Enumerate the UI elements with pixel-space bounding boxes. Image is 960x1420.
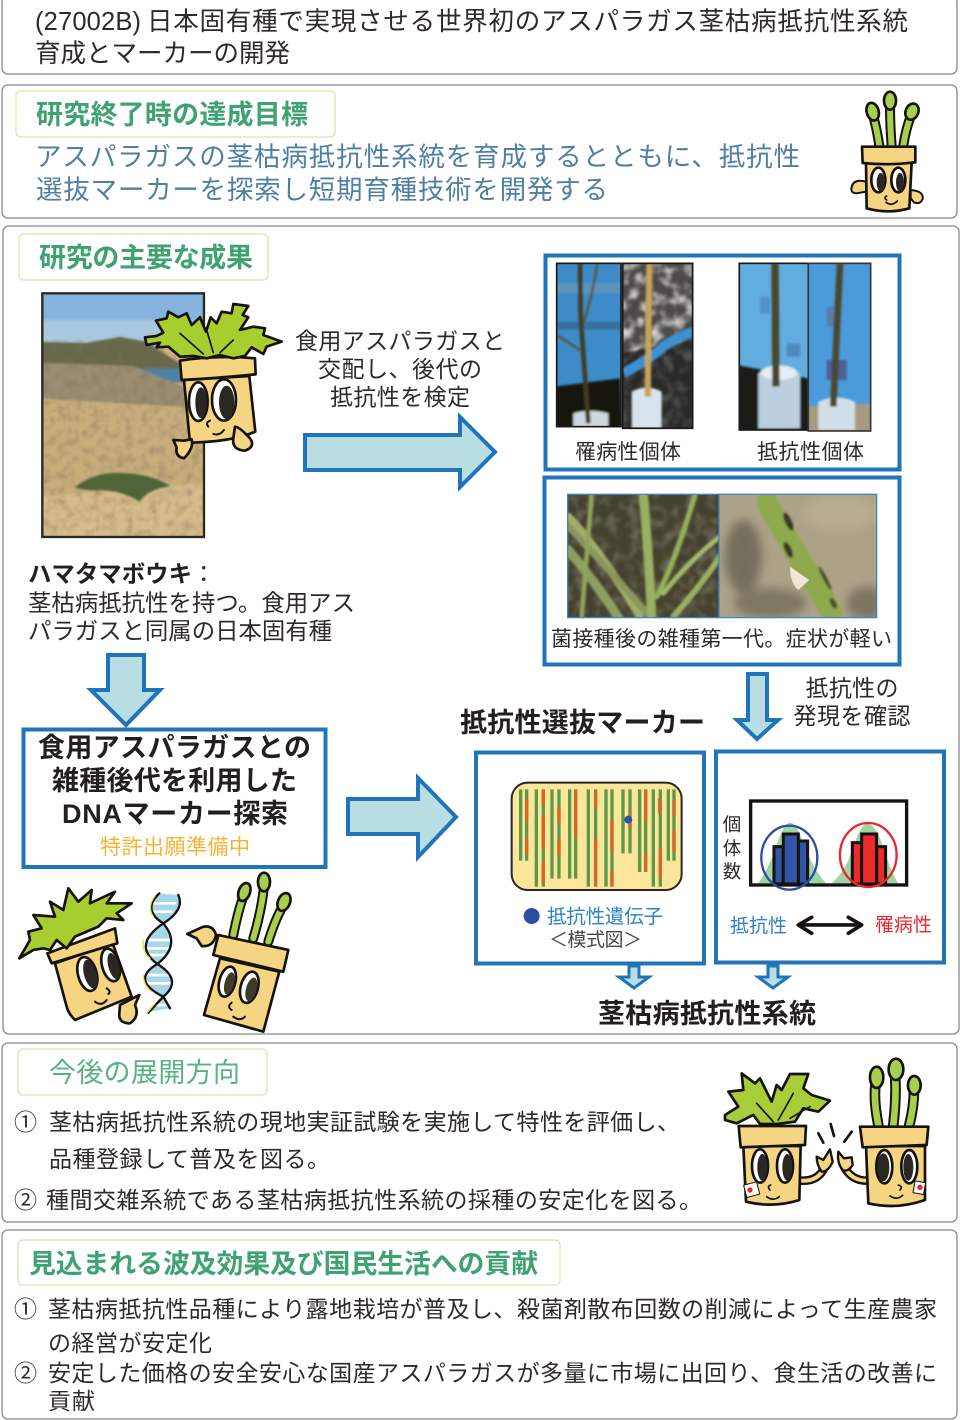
text: confirm resistance [794,675,910,729]
heading: stem blight resistant line: 茎枯病抵抗性系統 [598,999,816,1029]
list: future items: 茎枯病抵抗性系統の現地実証試験を実施して特性を評価し、 [49,1109,680,1135]
axis label: number of individuals [723,814,741,882]
legend: resistance gene: 抵抗性遺伝子 [547,906,663,928]
icon: hamatamabouki mascot pointing [19,888,139,1023]
heading: main results [19,234,268,280]
list: impact items: ② [14,1360,37,1386]
arrow: right to marker panels [348,778,456,857]
heading: main results: 研究の主要な成果 [39,243,253,273]
description: hamatamabouki: パラガスと同属の日本固有種 [28,618,332,644]
title text [35,8,908,68]
panel: F1 hybrid photos [544,478,900,664]
label: susceptible: 罹病性 [875,914,932,936]
title text: 育成とマーカーの開発 [35,40,290,68]
list: future items: ② [14,1187,37,1213]
heading: expected impact: 見込まれる波及効果及び国民生活への貢献 [29,1249,538,1279]
heading: future direction [18,1049,267,1095]
list: impact items [14,1296,937,1414]
list: impact items: 茎枯病抵抗性品種により露地栽培が普及し、殺菌剤散布回数の削減によって生産農家 [48,1296,937,1322]
heading: goal: 研究終了時の達成目標 [36,100,308,130]
panel: expected impact [2,1230,957,1419]
text: crossing with edible asparagus: 食用アスパラガスと [295,328,505,354]
icon: DNA helix [143,893,180,1013]
panel: disease test photos [546,256,900,470]
title text: (27002B) [35,8,141,36]
panel: future direction [2,1043,957,1222]
text: crossing with edible asparagus [295,328,505,410]
chart: distribution histogram [751,801,907,933]
axis label: number of individuals: 個 [723,814,741,835]
heading: expected impact [18,1240,560,1285]
heading: resistance selection marker: 抵抗性選抜マーカー [460,708,705,738]
arrow: right to test photos [305,417,495,487]
panel: goal at end of research [2,85,957,218]
photo: resistant stem [737,263,810,432]
panel: project title [2,0,957,74]
list: future items: 品種登録して普及を図る。 [49,1146,330,1172]
title text: 日本固有種で実現させる世界初のアスパラガス茎枯病抵抗性系統 [147,8,908,36]
photo: hybrid plants [568,494,887,620]
description: hamatamabouki: 茎枯病抵抗性を持つ。食用アス [28,590,355,616]
panel: resistance gene schematic [476,752,704,964]
panel: individuals distribution [716,752,944,962]
axis label: number of individuals: 数 [723,861,741,882]
description: hamatamabouki: ハマタマボウキ [28,561,192,587]
arrow: down to marker box [91,655,160,725]
list: impact items: ① [14,1296,37,1322]
box: DNA marker search: 特許出願準備中 [100,836,250,859]
arrow: down to distribution chart [737,674,778,739]
goal text: アスパラガスの茎枯病抵抗性系統を育成するとともに、抵抗性 [35,142,800,172]
description: hamatamabouki [28,561,355,644]
label: resistant: 抵抗性個体 [757,441,864,464]
goal text [35,142,800,205]
photo: resistant stem close-up [807,263,873,432]
list: impact items: 安定した価格の安全安心な国産アスパラガスが多量に市場に出回り、食生活の改善に [48,1360,937,1386]
arrow: small down right [758,966,788,988]
description: hamatamabouki: ： [192,561,215,587]
label: schematic: ＜模式図＞ [549,929,642,951]
list: future items [14,1109,702,1213]
text: confirm resistance: 発現を確認 [794,703,910,729]
photo: susceptible stem close-up [622,263,693,430]
arrow: small down left [619,966,649,988]
icon: hamatamabouki mascot [145,304,282,458]
list: impact items: 貢献 [48,1388,95,1414]
text: crossing with edible asparagus: 抵抗性を検定 [330,384,470,410]
text: crossing with edible asparagus: 交配し、後代の [318,356,482,382]
list: future items: 種間交雑系統である茎枯病抵抗性系統の採種の安定化を図る。 [46,1187,702,1213]
chart: chromosome schematic [512,783,682,924]
goal text: 選抜マーカーを探索し短期育種技術を開発する [36,175,608,205]
label: resistant: 抵抗性 [730,915,787,937]
list: impact items: の経営が安定化 [48,1330,212,1356]
box: DNA marker search: DNAマーカー探索 [62,799,288,829]
list: future items: ① [14,1109,37,1135]
photo: susceptible individual [555,263,873,432]
panel: main research results [3,226,959,1034]
photo: hamatamabouki on beach [40,290,207,540]
icon: asparagus mascot pointing [187,873,293,1032]
caption: F1 hybrid: 菌接種後の雑種第一代。症状が軽い [551,628,892,651]
label: susceptible: 罹病性個体 [575,441,681,464]
resistance gene dot [624,816,632,824]
double arrow [798,917,862,933]
box: DNA marker search [24,730,326,867]
text: confirm resistance: 抵抗性の [806,675,898,701]
box: DNA marker search: 雑種後代を利用した [52,766,297,796]
heading: future direction: 今後の展開方向 [49,1058,240,1088]
heading: goal [16,91,335,137]
icon: two mascots high five [725,1059,928,1206]
legend dot [524,908,540,924]
axis label: number of individuals: 体 [723,838,741,859]
icon: asparagus mascot [851,92,923,211]
box: DNA marker search: 食用アスパラガスとの [38,733,311,763]
